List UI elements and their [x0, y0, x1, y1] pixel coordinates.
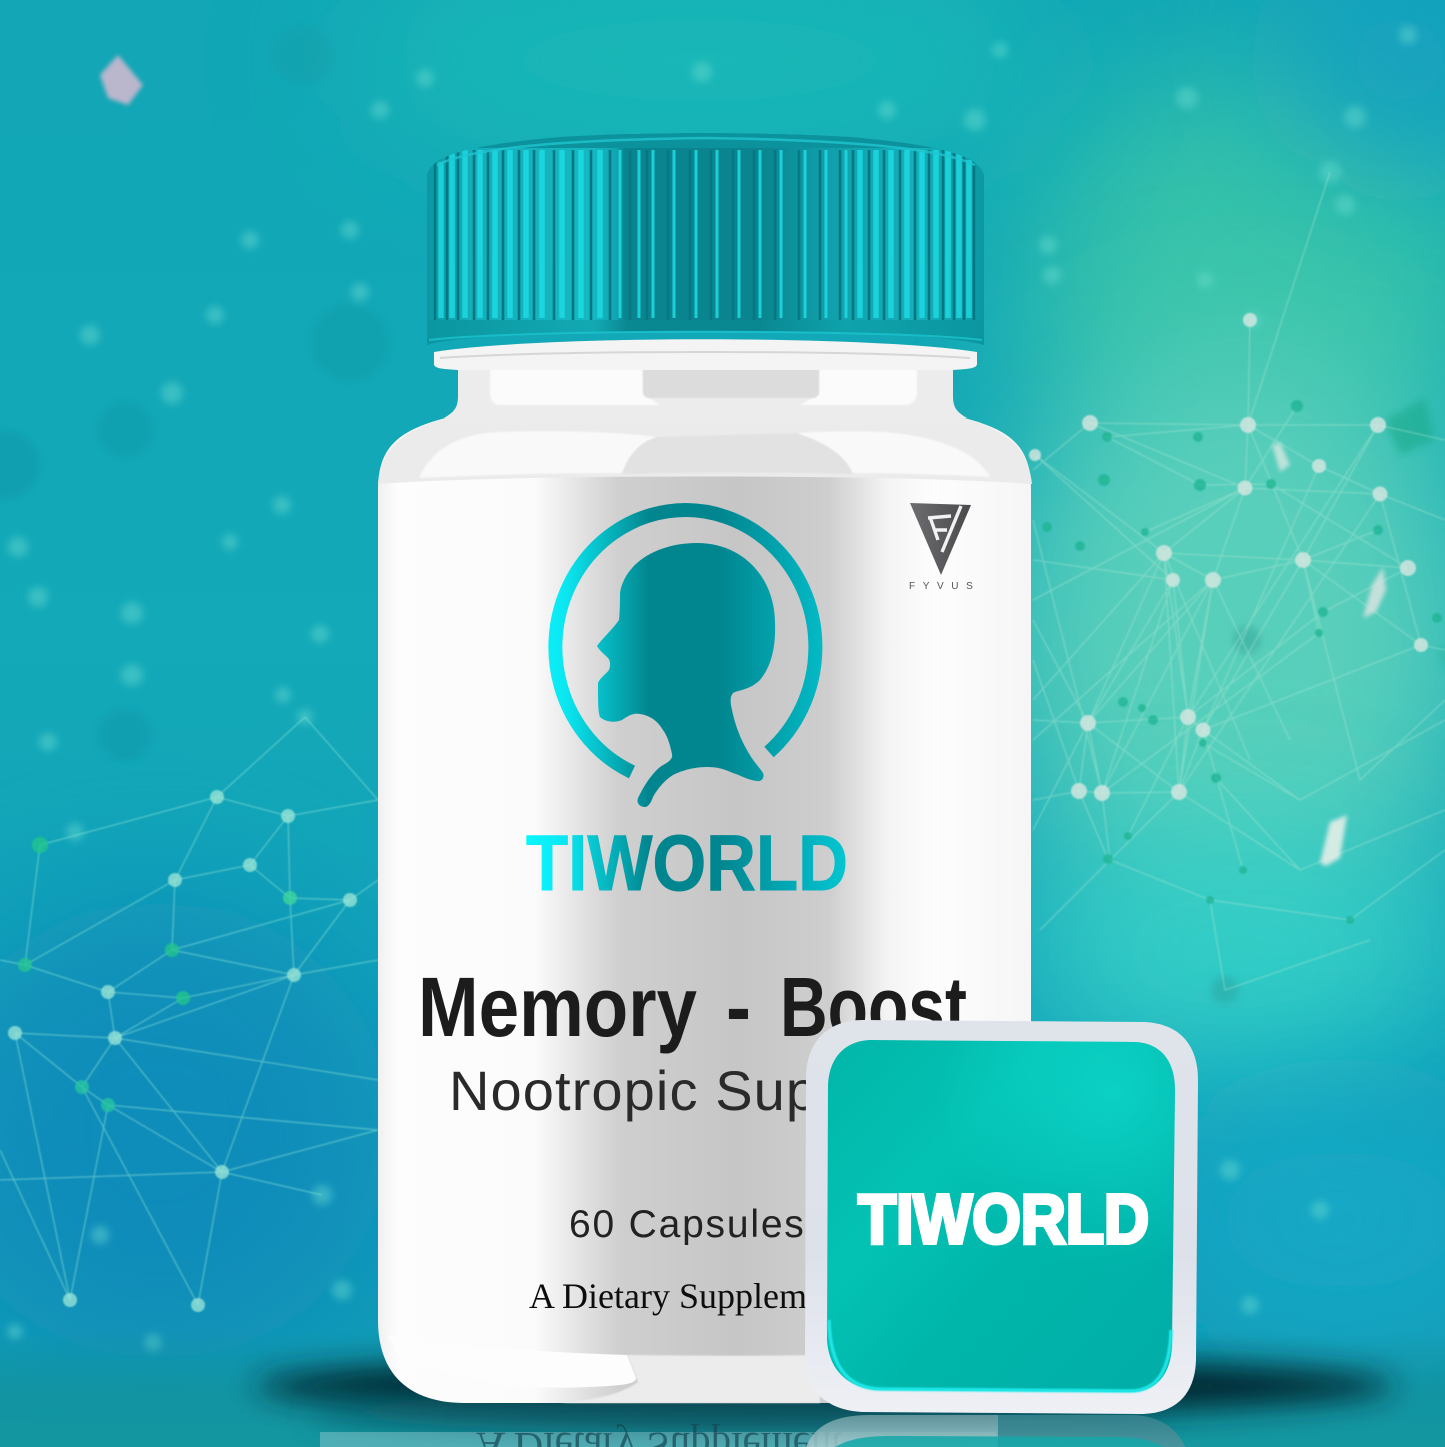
background network: left nodes — [8, 790, 357, 1312]
product name: Boost — [780, 960, 967, 1054]
card reflection — [806, 1415, 1185, 1447]
logo head silhouette — [597, 543, 775, 807]
cap ribs — [427, 133, 984, 350]
bottle rim — [434, 339, 977, 370]
bottle — [378, 133, 1032, 1403]
bottle shoulder — [378, 415, 1032, 484]
background network: left cluster — [0, 717, 378, 1305]
cap top highlight — [437, 138, 975, 165]
neck right highlight — [800, 356, 917, 405]
cap lower lip — [429, 332, 982, 340]
brand logo: ring and head — [555, 510, 815, 807]
neck left highlight — [490, 356, 660, 405]
product name: Memory — [418, 960, 697, 1054]
product subtitle: Nootropic Supplement — [449, 1059, 1025, 1122]
rim shadow line — [440, 352, 970, 358]
brand card — [805, 1020, 1198, 1414]
brand wordmark: TIWORLD — [526, 818, 848, 907]
logo ring — [555, 510, 815, 772]
card wordmark: TIWORLD — [858, 1180, 1149, 1258]
floor with shadow band — [0, 1330, 1445, 1447]
cap — [427, 133, 984, 350]
card reflection dark half — [998, 1415, 1185, 1447]
bottle neck — [444, 366, 967, 418]
FYVUS triangle mark — [910, 503, 971, 575]
product name: - — [726, 960, 751, 1054]
FYVUS logo — [909, 503, 980, 592]
bottle base highlight — [387, 1335, 636, 1388]
cap body — [427, 133, 984, 345]
product name — [418, 960, 967, 1054]
background crystal flecks — [100, 55, 1386, 866]
card reflection face — [835, 1436, 1165, 1447]
capsule count: 60 Capsules — [569, 1203, 806, 1246]
background dark patches — [1211, 398, 1445, 1004]
FYVUS monogram — [928, 506, 961, 552]
shoulder left highlight — [419, 431, 656, 478]
card bottom glow edge — [829, 1320, 1171, 1391]
supplement statement: A Dietary Supplement — [529, 1276, 851, 1316]
bottle reflection — [320, 1424, 996, 1447]
card sheen — [827, 1040, 1175, 1392]
neck centre shade — [643, 356, 819, 398]
shoulder right highlight — [797, 431, 990, 477]
bottle body — [378, 415, 1031, 1403]
background network: right pale nodes — [1029, 313, 1428, 801]
shoulder centre shade — [622, 433, 853, 474]
background network: right cluster — [1033, 172, 1445, 990]
FYVUS wordmark: FYVUS — [909, 581, 980, 592]
card frame — [805, 1020, 1198, 1414]
background network: right green nodes — [1042, 400, 1442, 924]
bottle base shade — [560, 1355, 820, 1403]
card face — [827, 1040, 1175, 1392]
